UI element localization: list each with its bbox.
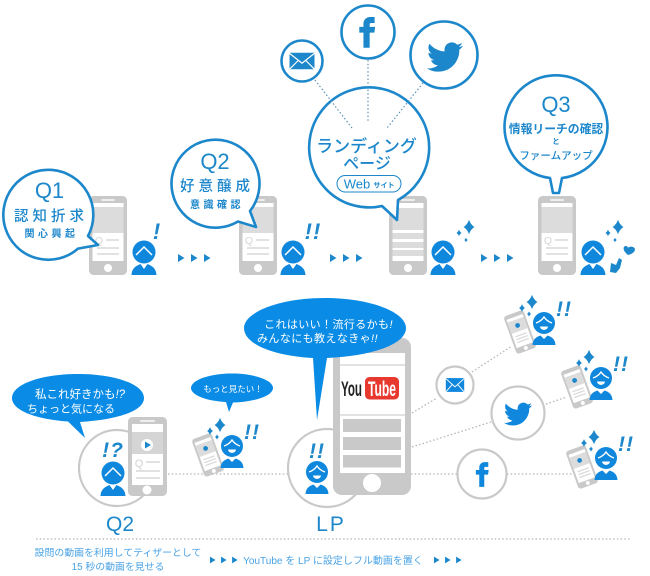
social links: dotted connectors (315, 60, 423, 128)
scene: LP with YouTube (244, 298, 411, 536)
person: exclamation: ! (153, 219, 161, 244)
speech bubble: Q2: 意識確認 (190, 198, 244, 211)
icon: twitter circle (410, 22, 478, 88)
person: fan with phone (191, 418, 260, 477)
share: twitter circle (492, 386, 544, 440)
speech bubble: landing page: ランディング (316, 136, 417, 156)
icon: facebook circle (342, 6, 394, 58)
speech bubble: Q2 reaction: ちょっと気になる (27, 402, 115, 416)
speech bubble: Q2: 好意醸成 (180, 178, 254, 195)
person: LP viewer: !! (309, 440, 325, 463)
scene: Q2 video teaser (12, 374, 167, 536)
logo: YouTube: You (341, 378, 362, 401)
person: exclamation (132, 219, 161, 275)
person: surprised (100, 439, 126, 496)
arrows: step 1 to 2 (178, 254, 210, 262)
caption: teaser (35, 546, 201, 573)
person: surprised: !? (102, 439, 124, 462)
speech bubble: landing page (309, 87, 429, 220)
arrows: step 2 to landing page (330, 254, 362, 262)
speech bubble: Q3: ファームアップ (519, 150, 593, 162)
gray circle: LP (288, 429, 366, 507)
caption: YouTube on LP: YouTube を LP に設定しフル動画を置く (243, 554, 423, 567)
phone: Q1 (89, 196, 127, 275)
logo: YouTube (341, 377, 399, 401)
arrows: caption 1 to 2 (210, 557, 238, 563)
speech bubble: LP reaction (244, 298, 406, 420)
speech bubble: Q2 (172, 140, 260, 228)
speech bubble: LP reaction: みんなにも教えなきゃ!! (257, 332, 378, 345)
arrows: landing page to Q3 (481, 254, 514, 262)
caption: teaser: 設問の動画を利用してティザーとして (35, 546, 201, 559)
share: facebook circle (458, 450, 506, 498)
icon: mail circle (282, 40, 322, 82)
person: sparkles and heart (580, 220, 635, 275)
speech bubble: Q1: 関心興起 (24, 227, 78, 240)
fan: bottom (565, 430, 634, 489)
fan: top (503, 295, 572, 354)
pill: Web site: サイト (374, 182, 394, 190)
step 1: Q1 (3, 170, 161, 275)
pill: Web site (337, 176, 401, 192)
speech bubble: Q3: と (552, 137, 560, 146)
flow line: dotted connectors (168, 346, 573, 474)
person: double exclamation (280, 219, 321, 275)
phone: landing page (389, 196, 427, 275)
phone: YouTube (333, 338, 411, 495)
phone: video (128, 417, 167, 496)
logo: YouTube: Tube (368, 378, 396, 401)
share: mail circle (436, 366, 474, 404)
caption: teaser: 15 秒の動画を見せる (72, 560, 164, 573)
pill: Web site: Web (344, 176, 370, 192)
divider (36, 538, 630, 540)
phone: Q3 (538, 196, 576, 275)
speech bubble: Q1 (3, 170, 98, 260)
person: double exclamation: !! (305, 219, 321, 244)
speech bubble: Q1: Q1 (35, 178, 64, 203)
speech bubble: more: もっと見たい！ (203, 384, 263, 394)
scene: small fan wanting more (191, 374, 273, 477)
step 2: Q2 (172, 140, 321, 275)
speech bubble: Q3 (505, 75, 608, 193)
speech bubble: Q2: Q2 (200, 149, 230, 174)
speech bubble: landing page: ページ (343, 156, 391, 173)
step 3: landing page (282, 6, 478, 275)
speech bubble: Q2 reaction: 私これ好きかも!? (35, 387, 126, 401)
arrows: after caption 2 (434, 557, 462, 563)
person: sparkles (430, 220, 474, 275)
speech bubble: Q3: Q3 (541, 92, 571, 117)
fan: middle (560, 350, 629, 409)
phone: Q2 (239, 196, 277, 275)
label: Q2: Q2 (106, 513, 134, 536)
gray circle: Q2 (79, 430, 155, 506)
step 4: Q3 (505, 75, 635, 275)
speech bubble: Q1: 認知折求 (14, 208, 88, 225)
speech bubble: LP reaction: これはいい！流行るかも! (264, 318, 393, 331)
phone: video: Q (135, 458, 144, 470)
speech bubble: Q3: 情報リーチの確認 (509, 122, 603, 136)
speech bubble: Q2 reaction (12, 374, 144, 438)
person: LP viewer (306, 440, 328, 494)
label: LP: LP (316, 513, 346, 536)
